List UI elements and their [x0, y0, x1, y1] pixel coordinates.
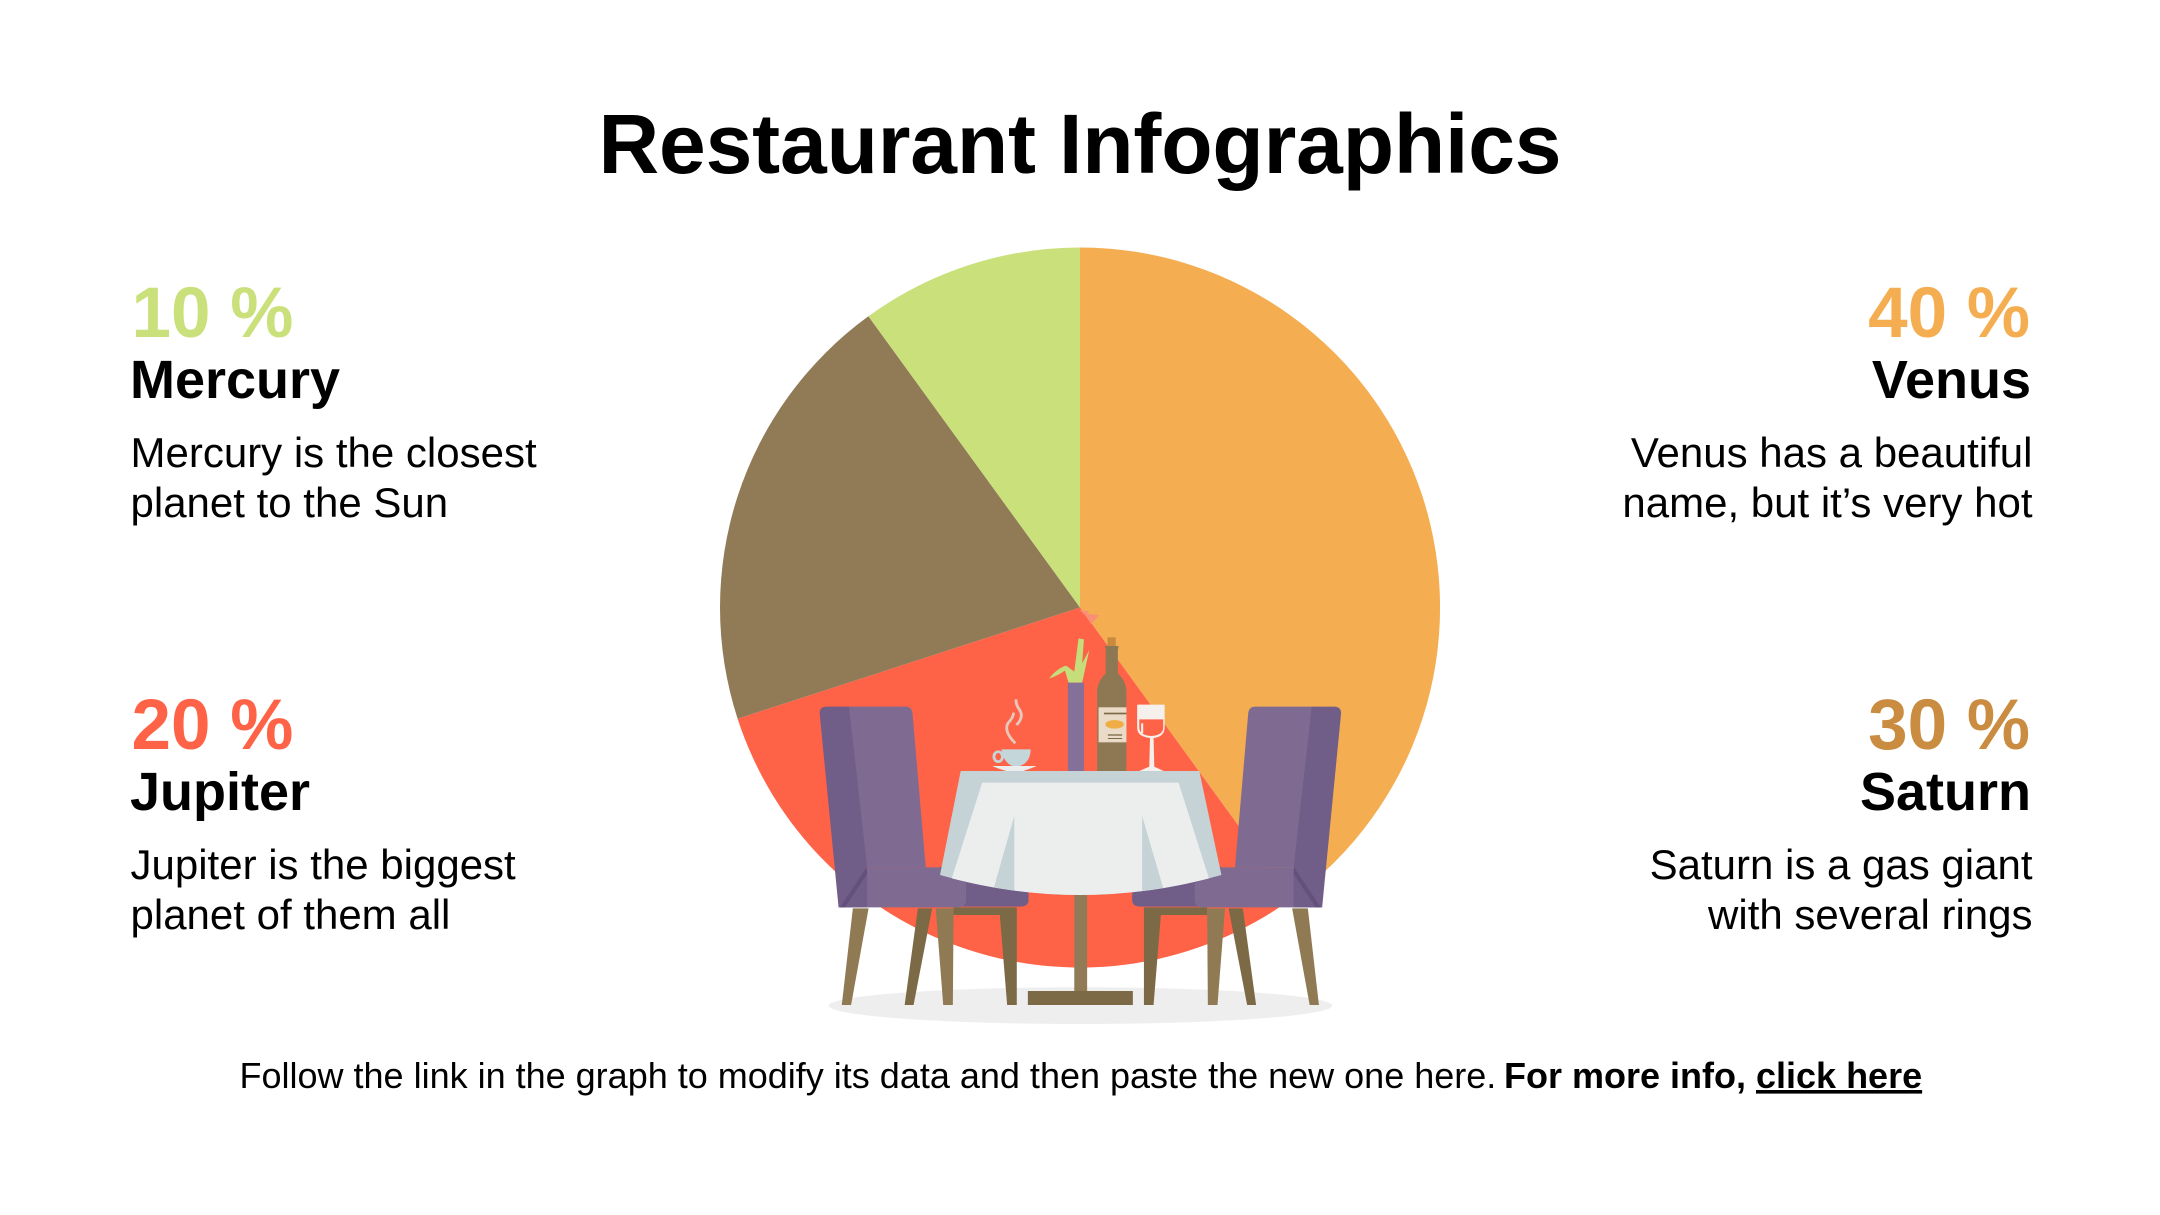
- description: planet to the Sun: [130, 479, 448, 526]
- illustration: restaurant table with two chairs: [820, 610, 1341, 1024]
- wine glass: [1137, 705, 1165, 771]
- percent: 20 %: [132, 686, 293, 765]
- slice: red 30%: [738, 608, 1292, 968]
- name: Mercury: [130, 350, 340, 410]
- description: Saturn is a gas giant: [1650, 841, 2033, 888]
- name: Venus: [1872, 350, 2031, 410]
- coffee cup with steam: [992, 699, 1037, 771]
- text block: Saturn: [1650, 686, 2033, 938]
- footer note: Follow the link in the graph to modify its data and then paste the new one here.: [240, 1055, 1496, 1096]
- table stem and base: [1028, 890, 1133, 1005]
- name: Saturn: [1860, 762, 2031, 822]
- pie chart: [720, 248, 1440, 968]
- title: Restaurant Infographics: [598, 97, 1562, 191]
- text block: Jupiter: [130, 686, 516, 938]
- wine bottle: [1097, 637, 1126, 771]
- left chair: [820, 707, 1029, 1005]
- description: Mercury is the closest: [130, 429, 537, 476]
- slice: green 10%: [868, 248, 1080, 608]
- description: planet of them all: [130, 891, 450, 938]
- slice: orange 40%: [1080, 248, 1440, 899]
- description: Venus has a beautiful: [1631, 429, 2032, 476]
- text block: Mercury: [130, 274, 537, 526]
- footer note: For more info, click here: [1504, 1055, 1922, 1096]
- right chair: [1132, 707, 1341, 1005]
- percent: 40 %: [1868, 274, 2030, 353]
- description: Jupiter is the biggest: [130, 841, 516, 888]
- slice: brown 20%: [720, 316, 1080, 719]
- floor shadow: [829, 987, 1332, 1024]
- tablecloth: [940, 771, 1221, 895]
- vase with leaves: [1049, 638, 1089, 771]
- description: with several rings: [1707, 891, 2032, 938]
- percent: 30 %: [1868, 686, 2030, 765]
- percent: 10 %: [132, 274, 293, 353]
- text block: Venus: [1622, 274, 2033, 526]
- apex detail: [1079, 610, 1099, 624]
- name: Jupiter: [130, 762, 310, 822]
- description: name, but it’s very hot: [1622, 479, 2033, 526]
